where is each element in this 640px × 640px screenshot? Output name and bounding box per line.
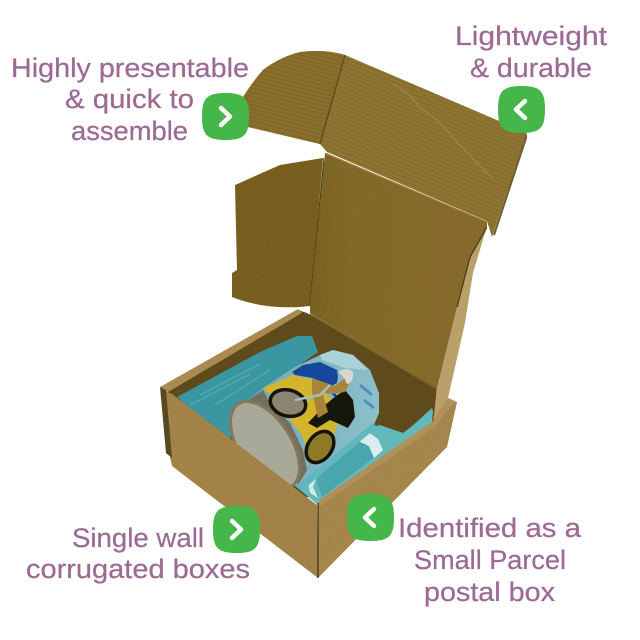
left lid side tab: [232, 158, 324, 307]
label text: [11, 53, 249, 146]
icon: green left chevron badge: [347, 494, 394, 541]
label text: & durable: [470, 53, 592, 83]
icon: green right chevron badge: [202, 93, 249, 140]
box top flap with side tab: [243, 51, 527, 237]
mug handle interior: [315, 440, 376, 497]
mug art: yellow hills: [263, 375, 342, 463]
label text: postal box: [424, 577, 556, 607]
mug body: [245, 350, 379, 487]
callout: single wall corrugated: [26, 506, 260, 584]
lid side edge: [433, 227, 487, 423]
callout: small parcel postal box: [347, 494, 582, 607]
icon: green left chevron badge: [498, 86, 545, 133]
label text: assemble: [71, 116, 188, 146]
mug art: upper wheel: [267, 386, 309, 420]
mug art: lower wheel: [300, 426, 340, 468]
label text: Identified as a: [398, 513, 582, 543]
cardboard box with mug: [160, 51, 527, 578]
callout: lightweight and durable: [455, 21, 608, 133]
label text: [26, 523, 250, 584]
label text: Highly presentable: [11, 53, 249, 83]
box interior back walls: [163, 310, 437, 500]
label text: [398, 513, 582, 607]
box front right panel: [318, 398, 457, 578]
mug art: sky: [292, 362, 343, 403]
mug base: [217, 390, 313, 500]
box lid inner panel: [310, 153, 487, 389]
label text: Single wall: [72, 523, 204, 553]
label text: corrugated boxes: [26, 554, 250, 584]
mug art: cyclist: [308, 390, 355, 428]
box front left panel: [163, 390, 318, 578]
label text: Small Parcel: [414, 545, 566, 575]
mug: [217, 350, 383, 500]
mug art: grey road: [245, 390, 307, 485]
mug handle upper: [358, 431, 383, 458]
mug handle lower: [307, 477, 318, 498]
teal tissue paper: [177, 336, 433, 505]
label text: [455, 21, 608, 83]
label text: & quick to: [65, 84, 194, 114]
callout: highly presentable: [11, 53, 249, 146]
icon: green right chevron badge: [213, 506, 260, 553]
label text: Lightweight: [455, 21, 608, 51]
